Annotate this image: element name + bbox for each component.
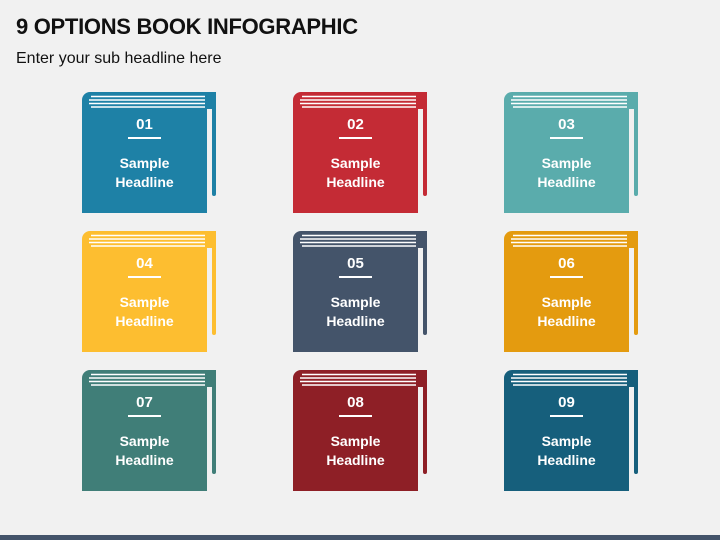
book 03: Sample [542,155,591,171]
book 09: Sample [542,433,591,449]
book 09 [504,370,638,491]
book 09: Headline [537,452,596,468]
book 02 [293,92,427,213]
book 07 [82,370,216,491]
book 01: Headline [115,174,174,190]
subtitle: Enter your sub headline here [16,50,221,67]
book 05: Sample [331,294,380,310]
book 08: 08 [347,394,364,411]
book 01: Sample [120,155,169,171]
book 04 [82,231,216,352]
book 02: 02 [347,116,364,133]
book 04: Headline [115,313,174,329]
book 02: Sample [331,155,380,171]
book 09: 09 [558,394,575,411]
book 01 [82,92,216,213]
book 03: 03 [558,116,575,133]
book 06: Sample [542,294,591,310]
book 07: Sample [120,433,169,449]
book 03 [504,92,638,213]
book 05 [293,231,427,352]
book 06 [504,231,638,352]
book 07: 07 [136,394,153,411]
book 04: 04 [136,255,153,272]
book 05: Headline [326,313,385,329]
book 05: 05 [347,255,364,272]
book 04: Sample [120,294,169,310]
book 06: Headline [537,313,596,329]
book 08: Sample [331,433,380,449]
book 06: 06 [558,255,575,272]
book 01: 01 [136,116,153,133]
book 07: Headline [115,452,174,468]
bottom bar [0,535,720,540]
title: 9 OPTIONS BOOK INFOGRAPHIC [16,14,358,39]
book 08: Headline [326,452,385,468]
book 03: Headline [537,174,596,190]
book 08 [293,370,427,491]
book 02: Headline [326,174,385,190]
